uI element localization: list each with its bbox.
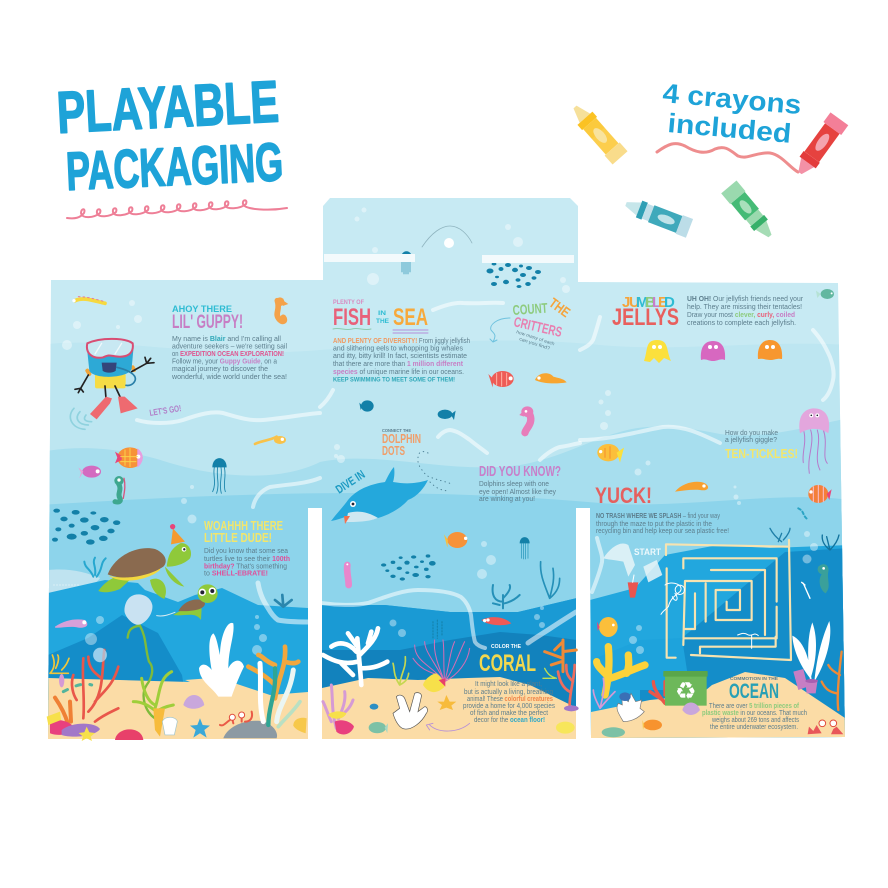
- text: coral paragraph: animal! These colorful creatures: [467, 696, 553, 703]
- text: diversity paragraph: that there are more than 1 million different: [333, 361, 464, 368]
- heading: plenty of fish in the sea: IN: [378, 310, 386, 317]
- text: diversity paragraph: KEEP SWIMMING TO MEET SOME OF THEM!: [333, 376, 455, 384]
- heading: plenty of fish in the sea: [333, 300, 428, 333]
- panel: ahoy there intro: [70, 297, 288, 502]
- heading: plenty of fish in the sea: THE: [376, 318, 390, 325]
- heading: count the critters: THE: [546, 294, 573, 320]
- heading: connect the dolphin dots: CONNECT THE: [382, 428, 411, 433]
- text: plastic fact: plastic waste in our oceans. That much: [702, 710, 807, 717]
- text: tentacle instructions: creations to complete each jellyfish.: [687, 320, 796, 327]
- pink loop squiggle under title: [67, 200, 287, 218]
- text: dolphin fact: are winking at you!: [479, 496, 535, 503]
- title: playable packaging: PLAYABLE: [55, 68, 280, 146]
- icon: green crayon: [721, 181, 778, 242]
- text: maze instructions: through the maze to put the plastic in the: [596, 521, 712, 528]
- icons: fish and eel: [597, 289, 834, 503]
- illustration: purple jellyfish: [799, 408, 829, 473]
- panel: jumbled jellys: [597, 289, 834, 503]
- illustration: plastic litter, reef and recycling bin: [593, 508, 843, 737]
- icon: yellow crayon: [568, 100, 628, 165]
- panel: color the coral: [323, 532, 579, 734]
- callout: 4 crayons included: [661, 78, 803, 149]
- heading: ahoy there lil' guppy: LIL' GUPPY!: [172, 312, 243, 333]
- text: intro paragraph: adventure seekers – we're setting sail: [172, 344, 287, 350]
- heading: yuck: YUCK!: [595, 483, 652, 508]
- heading: commotion in the ocean: COMMOTION IN THE: [730, 676, 778, 681]
- flap decor: jellyfish and school of fish: [401, 251, 541, 288]
- decorative white currents: [137, 303, 834, 648]
- text: plastic fact: [702, 703, 807, 731]
- icon: sea creatures in intro panel: [72, 297, 288, 502]
- heading: jumbled jellys: JELLYS: [612, 304, 679, 331]
- text: tentacle instructions: UH OH! Our jellyfish friends need your: [687, 296, 804, 303]
- text: intro paragraph: magical journey to discover the: [172, 366, 268, 373]
- illustration: school of fish, turtles, balloon, reef: [47, 509, 307, 741]
- heading: jumbled jellys: B: [645, 294, 656, 311]
- heading: did you know: DID YOU KNOW?: [479, 463, 561, 480]
- flap: die-cut slits and thumb hole: [324, 226, 574, 263]
- text: diversity paragraph: AND PLENTY OF DIVERSITY! From jiggly jellyfish: [333, 338, 470, 345]
- label: dive in: DIVE IN: [333, 467, 367, 497]
- heading: color the coral: CORAL: [479, 650, 536, 677]
- illustration: dolphin: [331, 467, 428, 524]
- heading: plenty of fish in the sea: FISH: [333, 304, 371, 331]
- text: diversity paragraph: [333, 338, 470, 384]
- text: coral paragraph: but is actually a living, breathing: [464, 689, 553, 696]
- title: playable packaging: [55, 68, 284, 202]
- text: dolphin fact: eye open! Almost like they: [479, 489, 556, 496]
- text: coral paragraph: of fish and make the perfect: [470, 710, 548, 717]
- icon: red crayon: [791, 112, 848, 179]
- icon: teal crayon: [622, 195, 693, 238]
- heading: jumbled jellys: L: [652, 294, 661, 311]
- text: tentacle instructions: help. They are missing their tentacles!: [687, 304, 802, 311]
- heading: color the coral: COLOR THE: [491, 644, 521, 650]
- heading: commotion in the ocean: [729, 676, 779, 703]
- text: intro paragraph: Follow me, your Guppy Guide, on a: [172, 358, 277, 366]
- heading: count the critters: COUNT: [512, 300, 548, 318]
- panel: packaging background with ocean layers: [40, 190, 860, 750]
- label: start: START: [634, 547, 661, 557]
- heading: connect the dolphin dots: [382, 428, 421, 458]
- text: turtle fact: Did you know that some sea: [204, 548, 288, 555]
- text: jellyfish joke: [725, 430, 798, 461]
- label: let's go: LET'S GO!: [149, 403, 182, 418]
- text: turtle fact: birthday? That's something: [204, 564, 287, 570]
- heading: woahhh there little dude: WOAHHH THERE: [204, 518, 283, 533]
- decorative bubbles: [62, 208, 818, 662]
- heading: jumbled jellys: D: [664, 294, 675, 311]
- heading: count the critters: can you find?: [519, 336, 551, 351]
- panel: fish in the sea: [331, 294, 573, 524]
- text: plastic fact: the entire underwater ecosystem.: [710, 724, 798, 731]
- callout: 4 crayons included: 4 crayons: [661, 78, 803, 120]
- icons: fish to count: [359, 371, 567, 433]
- text: plastic fact: weighs about 269 tons and affects: [711, 717, 799, 724]
- text: coral paragraph: provide a home for 4,000 species: [463, 703, 555, 710]
- text: dolphin fact: Dolphins sleep with one: [479, 481, 549, 488]
- text: tentacle instructions: [687, 296, 804, 327]
- heading: count the critters: CRITTERS: [512, 313, 564, 340]
- text: intro paragraph: on EXPEDITION OCEAN EXPLORATION!: [172, 351, 284, 358]
- heading: count the critters: [512, 294, 573, 351]
- dotted dolphin outline: [418, 452, 452, 491]
- text: coral paragraph: It might look like a plant,: [475, 681, 542, 688]
- heading: plenty of fish in the sea: PLENTY OF: [333, 300, 364, 306]
- heading: woahhh there little dude: [204, 518, 283, 545]
- heading: commotion in the ocean: OCEAN: [729, 680, 779, 703]
- text: diversity paragraph: and itty, bitty krill! In fact, scientists estimate: [333, 353, 467, 360]
- heading: jumbled jellys: [612, 294, 679, 331]
- text: intro paragraph: wonderful, wide world under the sea!: [171, 374, 287, 381]
- panel: whoah there turtle: [47, 509, 307, 741]
- text: jellyfish joke: TEN-TICKLES!: [725, 446, 798, 461]
- callout: 4 crayons included: included: [666, 108, 793, 149]
- text: dolphin fact: [479, 481, 556, 503]
- illustration: middle reef: [323, 532, 579, 734]
- icons: three jellyfish without tentacles: [644, 340, 782, 363]
- text: diversity paragraph: species of unique marine life in our oceans.: [333, 369, 464, 376]
- text: maze instructions: [596, 513, 729, 535]
- text: jellyfish joke: a jellyfish giggle?: [725, 437, 777, 444]
- text: turtle fact: [204, 548, 290, 578]
- text: diversity paragraph: and slithering eels to whopping big whales: [333, 346, 463, 352]
- text: turtle fact: turtles live to see their 100th: [204, 556, 290, 563]
- text: maze instructions: NO TRASH WHERE WE SPLASH – find your way: [596, 513, 720, 520]
- heading: woahhh there little dude: LITTLE DUDE!: [204, 530, 272, 545]
- heading: jumbled jellys: J: [622, 294, 630, 311]
- text: jellyfish joke: How do you make: [725, 430, 778, 437]
- title: playable packaging: PACKAGING: [65, 132, 284, 202]
- crayon scribble line: [657, 144, 798, 172]
- heading: connect the dolphin dots: DOLPHIN: [382, 431, 421, 446]
- heading: count the critters: how many of each: [516, 329, 556, 346]
- text: intro paragraph: [171, 336, 287, 381]
- heading: jumbled jellys: M: [636, 294, 648, 311]
- text: coral paragraph: decor for the ocean floor!: [474, 717, 545, 724]
- heading: connect the dolphin dots: DOTS: [382, 443, 405, 458]
- heading: color the coral: [479, 644, 536, 677]
- heading: jumbled jellys: E: [658, 294, 668, 311]
- panel: no trash maze: [593, 508, 843, 737]
- text: plastic fact: There are over 5 trillion pieces of: [709, 703, 800, 710]
- heading: jumbled jellys: U: [629, 294, 640, 311]
- text: intro paragraph: My name is Blair and I'm calling all: [172, 336, 281, 343]
- heading: ahoy there lil' guppy: AHOY THERE: [172, 304, 232, 315]
- illustration: diver character Blair: [70, 339, 154, 429]
- text: maze instructions: recycling bin and help keep our sea plastic free!: [596, 528, 729, 535]
- heading: plenty of fish in the sea: SEA: [393, 304, 428, 331]
- text: coral paragraph: [463, 681, 555, 724]
- illustration: plastic litter, reef and recycling bin: ♻: [675, 677, 696, 705]
- text: turtle fact: to SHELL-EBRATE!: [204, 570, 268, 578]
- text: tentacle instructions: Draw your most clever, curly, coiled: [687, 312, 795, 319]
- arrow: critters curve: [490, 318, 510, 342]
- heading: ahoy there lil' guppy: [172, 304, 243, 333]
